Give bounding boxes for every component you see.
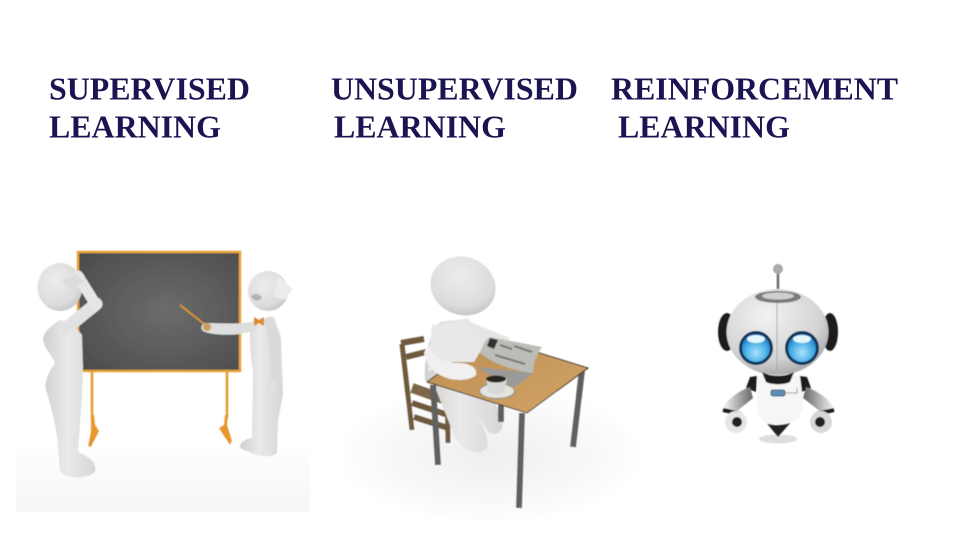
robot eyes <box>740 332 818 364</box>
heading: reinforcement learning <box>611 72 898 144</box>
illustration: teacher and student at blackboard <box>16 252 310 512</box>
student figure <box>38 263 96 477</box>
heading: supervised learning: SUPERVISED <box>49 72 250 106</box>
heading: unsupervised learning: LEARNING <box>334 110 506 144</box>
robot arms <box>723 387 834 433</box>
chair <box>401 339 448 443</box>
illustration: robot <box>718 264 838 444</box>
floor shadow <box>16 440 310 512</box>
robot body <box>746 373 811 444</box>
desk <box>427 337 588 508</box>
teacher figure <box>180 271 293 456</box>
robot head <box>718 289 838 384</box>
antenna <box>773 264 783 293</box>
heading: reinforcement learning: REINFORCEMENT <box>611 72 898 106</box>
torso, arms and head <box>422 247 510 380</box>
heading: unsupervised learning: UNSUPERVISED <box>331 72 578 106</box>
newspaper <box>477 337 542 387</box>
heading: unsupervised learning <box>331 72 578 144</box>
illustration: person reading at desk <box>335 247 645 525</box>
coffee cup <box>480 376 514 398</box>
blackboard <box>78 252 240 447</box>
floor shadow <box>335 385 645 525</box>
heading: reinforcement learning: LEARNING <box>618 110 790 144</box>
heading: supervised learning <box>49 72 250 144</box>
person <box>425 318 502 452</box>
heading: supervised learning: LEARNING <box>49 110 221 144</box>
